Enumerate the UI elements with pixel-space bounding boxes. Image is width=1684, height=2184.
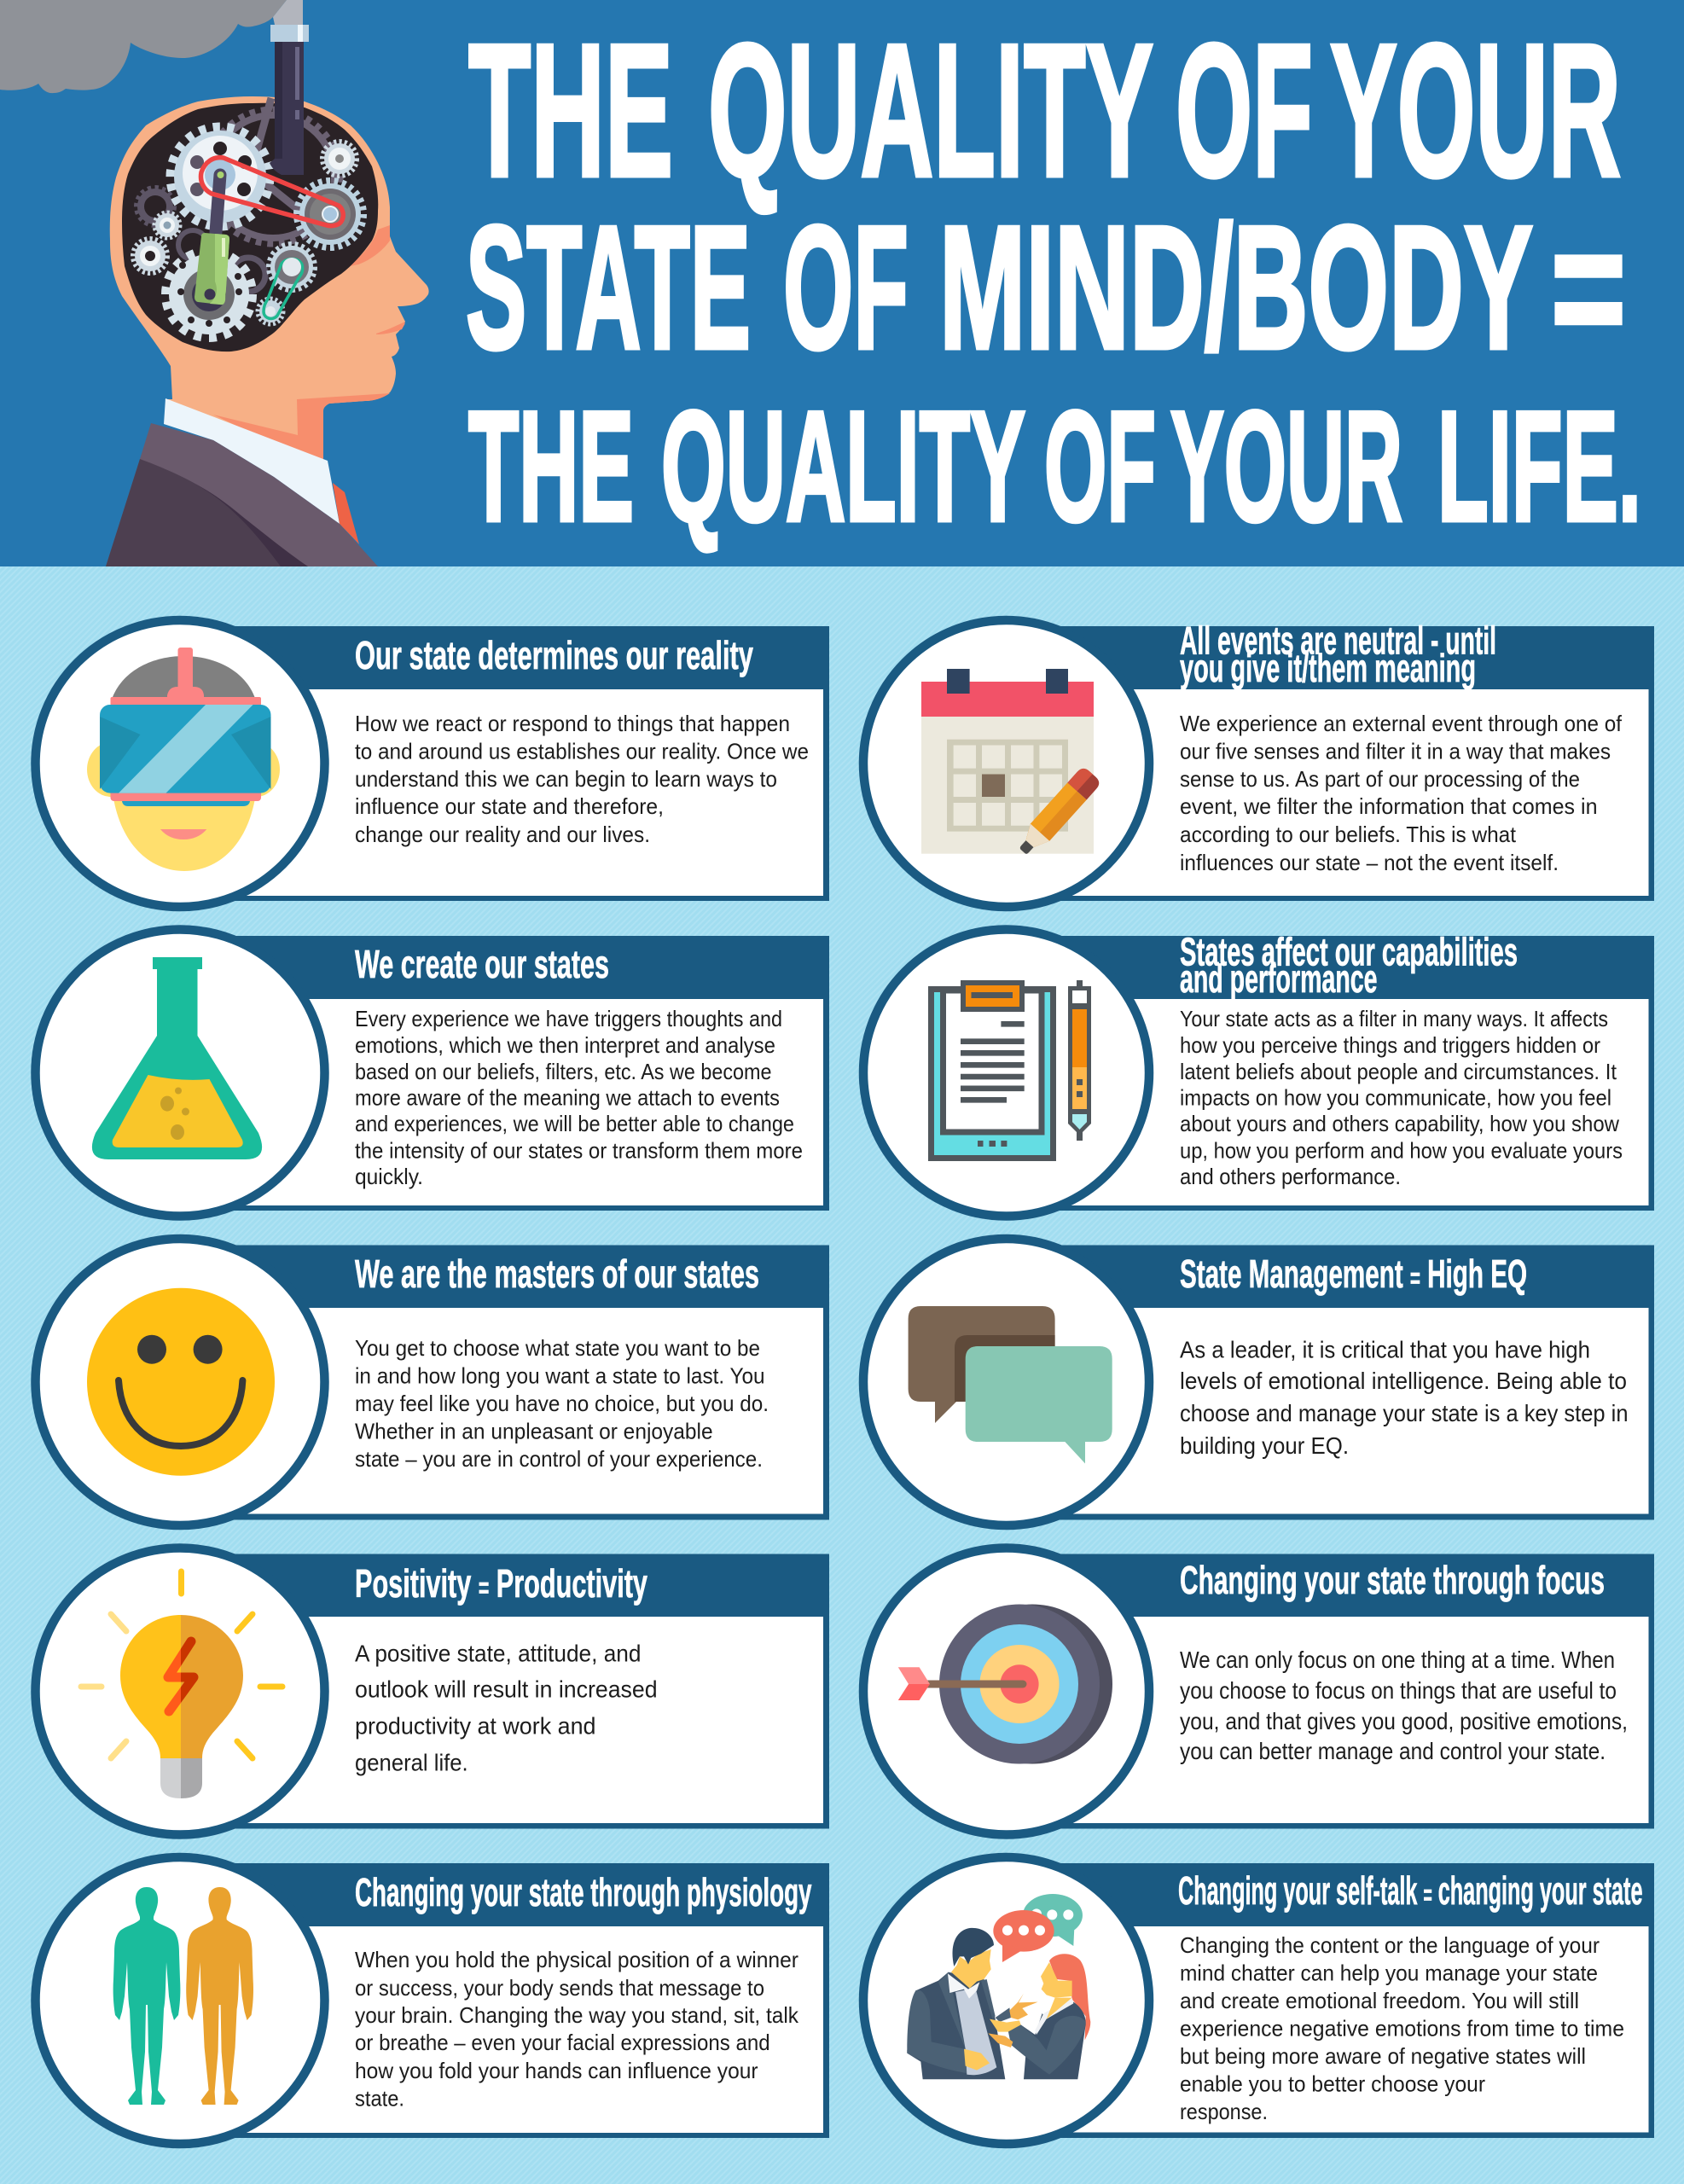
head xyxy=(110,96,429,461)
panel: we are the masters of our states xyxy=(36,1239,829,1525)
body text: you can better manage and control your state. xyxy=(1180,1738,1606,1764)
icon: VR headset xyxy=(87,648,280,871)
icon: target and arrow xyxy=(898,1604,1112,1764)
body text: latent beliefs about people and circumstances. It xyxy=(1180,1059,1617,1084)
panel: our state determines our reality xyxy=(36,620,829,907)
smoke cloud xyxy=(0,0,287,93)
body text: We can only focus on one thing at a time. When xyxy=(1180,1647,1615,1673)
body text: you, and that gives you good, positive emotions, xyxy=(1180,1708,1628,1734)
teal belt xyxy=(264,259,303,318)
body text xyxy=(1180,1932,1624,2124)
body text: levels of emotional intelligence. Being able to xyxy=(1180,1368,1627,1394)
body text: response. xyxy=(1180,2099,1268,2124)
body text: change our reality and our lives. xyxy=(355,822,650,847)
icon: clipboard and pen xyxy=(932,980,1089,1159)
body text: may feel like you have no choice, but you do. xyxy=(355,1391,769,1416)
heading xyxy=(1180,618,1496,690)
suit and collar xyxy=(164,398,340,524)
body text: but being more aware of negative states will xyxy=(1180,2043,1586,2069)
body text: You get to choose what state you want to be xyxy=(355,1335,760,1361)
icon: two human figures xyxy=(113,1887,253,2105)
body text: sense to us. As part of our processing of the xyxy=(1180,766,1580,792)
icon: light bulb xyxy=(81,1571,282,1798)
body text: When you hold the physical position of a winner xyxy=(355,1947,798,1972)
body text: influence our state and therefore, xyxy=(355,793,664,819)
icon: speech bubbles xyxy=(909,1306,1112,1464)
body text: enable you to better choose your xyxy=(1180,2071,1485,2097)
face shadows xyxy=(213,393,390,461)
body text: outlook will result in increased xyxy=(355,1676,658,1703)
body text: We experience an external event through one of xyxy=(1180,711,1623,736)
big gear xyxy=(171,127,270,226)
title: YOUR xyxy=(1170,378,1402,554)
body text: about yours and others capability, how you show xyxy=(1180,1111,1619,1136)
body text: up, how you perform and how you evaluate yours xyxy=(1180,1138,1623,1164)
body text xyxy=(1180,1006,1623,1189)
body text: choose and manage your state is a key step in xyxy=(1180,1400,1628,1426)
body text: emotions, which we then interpret and analyse xyxy=(355,1032,775,1058)
panel: changing your state through physiology xyxy=(36,1857,829,2144)
body text: state – you are in control of your experience. xyxy=(355,1446,763,1472)
title: OF xyxy=(1044,378,1156,554)
icon: calendar and pencil xyxy=(921,669,1102,860)
body text xyxy=(1180,1647,1628,1764)
back gears xyxy=(136,98,340,292)
body text: How we react or respond to things that happen xyxy=(355,711,790,736)
body text: or breathe – even your facial expressions and xyxy=(355,2030,770,2055)
heading: We are the masters of our states xyxy=(355,1252,759,1296)
body text: experience negative emotions from time to time xyxy=(1180,2016,1624,2042)
heading: All events are neutral - until xyxy=(1180,618,1496,662)
panel: we create our states xyxy=(36,930,829,1217)
body text: mind chatter can help you manage your state xyxy=(1180,1960,1598,1986)
heading: you give it/them meaning xyxy=(1180,646,1476,690)
body text: impacts on how you communicate, how you feel xyxy=(1180,1085,1611,1111)
body text: quickly. xyxy=(355,1164,423,1189)
green piston xyxy=(195,233,229,305)
body text: A positive state, attitude, and xyxy=(355,1640,642,1667)
body text: according to our beliefs. This is what xyxy=(1180,822,1517,847)
heading: Positivity = Productivity xyxy=(355,1561,647,1606)
icon: smiley xyxy=(87,1288,275,1476)
heading: and performance xyxy=(1180,956,1377,1001)
brain cavity xyxy=(122,103,378,351)
panel: state management = high EQ xyxy=(863,1239,1654,1525)
illustration: businessman head with gears xyxy=(0,0,429,566)
body text: Every experience we have triggers thoughts and xyxy=(355,1006,782,1031)
title: QUALITY xyxy=(708,5,1153,217)
body text: productivity at work and xyxy=(355,1713,595,1739)
body text xyxy=(355,1006,803,1189)
body text: Changing the content or the language of your xyxy=(1180,1932,1600,1958)
title xyxy=(466,5,1641,554)
title: OF xyxy=(783,189,909,386)
title: OF xyxy=(1176,5,1313,217)
panel: changing your self-talk xyxy=(863,1857,1654,2144)
body text: or success, your body sends that message to xyxy=(355,1975,764,2001)
body text: the intensity of our states or transform them more xyxy=(355,1138,803,1164)
body text xyxy=(1180,711,1623,875)
mouth xyxy=(377,322,405,334)
heading: We create our states xyxy=(355,942,609,986)
icon: flask xyxy=(92,957,262,1159)
title: = xyxy=(1551,189,1626,386)
heading: State Management = High EQ xyxy=(1180,1252,1527,1296)
panel: positivity = productivity xyxy=(36,1548,829,1834)
body text: building your EQ. xyxy=(1180,1432,1349,1459)
body text: and others performance. xyxy=(1180,1164,1401,1189)
body text: event, we filter the information that comes in xyxy=(1180,793,1597,819)
body text: understand this we can begin to learn ways to xyxy=(355,766,777,792)
heading: Our state determines our reality xyxy=(355,633,753,677)
panel: states affect our capabilities xyxy=(863,930,1654,1217)
red belt xyxy=(201,158,343,226)
body text xyxy=(355,1947,799,2111)
body text: Your state acts as a filter in many ways. It affects xyxy=(1180,1006,1608,1031)
title: THE xyxy=(468,5,673,217)
body text: influences our state – not the event itself. xyxy=(1180,850,1559,875)
body text xyxy=(1180,1336,1628,1459)
body text: state. xyxy=(355,2085,404,2111)
pipe xyxy=(270,25,309,175)
body text: your brain. Changing the way you stand, sit, talk xyxy=(355,2002,799,2028)
body text xyxy=(355,1640,658,1776)
panel: changing your state through focus xyxy=(863,1548,1654,1834)
body text: Whether in an unpleasant or enjoyable xyxy=(355,1419,713,1444)
body text: general life. xyxy=(355,1749,468,1776)
body text: more aware of the meaning we attach to events xyxy=(355,1085,780,1111)
title: QUALITY xyxy=(661,378,1025,554)
lower gear xyxy=(165,251,253,338)
panel: all events are neutral xyxy=(863,618,1654,907)
title: THE xyxy=(468,378,634,554)
body text: how you fold your hands can influence your xyxy=(355,2058,758,2083)
body text: you choose to focus on things that are useful to xyxy=(1180,1677,1617,1704)
body text: and create emotional freedom. You will still xyxy=(1180,1988,1579,2013)
body text xyxy=(355,711,809,847)
small gears xyxy=(133,142,357,324)
body text: in and how long you want a state to last. You xyxy=(355,1363,765,1389)
background xyxy=(0,566,1684,2184)
heading xyxy=(1180,930,1518,1001)
body text: based on our beliefs, filters, etc. As we become xyxy=(355,1059,771,1084)
body text: how you perceive things and triggers hidden or xyxy=(1180,1032,1600,1058)
icon: two people talking xyxy=(907,1894,1090,2079)
title: STATE xyxy=(466,189,751,386)
lever xyxy=(216,175,220,232)
body text: to and around us establishes our reality. Once we xyxy=(355,739,809,764)
body text xyxy=(355,1335,769,1472)
body text: our five senses and filter it in a way that makes xyxy=(1180,739,1611,764)
right gear xyxy=(297,181,363,247)
heading: Changing your state through physiology xyxy=(355,1870,812,1914)
header banner xyxy=(0,0,1684,566)
body text: and experiences, we will be better able to change xyxy=(355,1111,794,1136)
body text: As a leader, it is critical that you have high xyxy=(1180,1336,1590,1363)
